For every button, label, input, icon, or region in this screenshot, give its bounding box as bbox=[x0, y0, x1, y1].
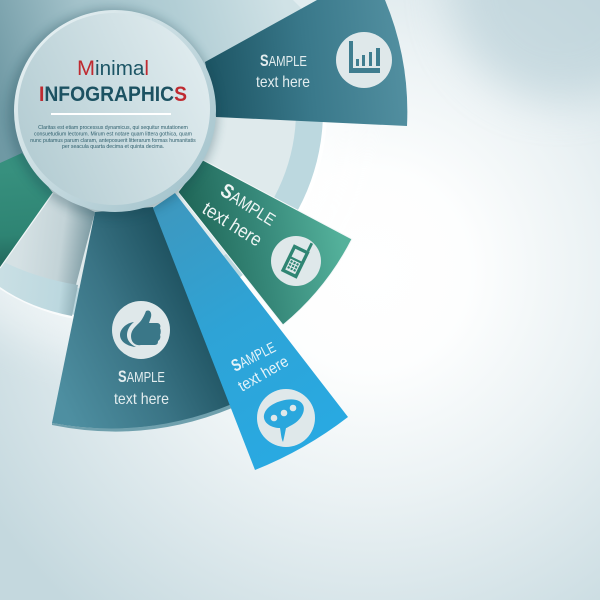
body text: per seacula quarta decima et quinta decima. bbox=[62, 144, 164, 150]
label: bottom sector bbox=[114, 367, 169, 408]
divider bbox=[51, 113, 171, 115]
lower left gray wedge bbox=[0, 193, 95, 316]
label: blue sector bbox=[228, 337, 292, 395]
label: blue sector: text here bbox=[236, 353, 292, 395]
label: top sector: SAMPLE bbox=[260, 51, 307, 70]
label: bottom sector: text here bbox=[114, 391, 169, 408]
label: green sector bbox=[198, 180, 280, 251]
label: green sector: text here bbox=[198, 198, 265, 251]
sector: bottom teal bbox=[52, 207, 232, 432]
icon: bar chart bbox=[336, 32, 392, 88]
title bbox=[39, 57, 187, 106]
sector: blue bbox=[153, 193, 348, 470]
title: INFOGRAPHICS bbox=[39, 82, 187, 106]
main circle bbox=[8, 8, 218, 218]
icon: mobile phone bbox=[271, 236, 321, 286]
label: green sector: SAMPLE bbox=[216, 180, 280, 231]
upper left shaded backdrop bbox=[0, 0, 320, 190]
sector: green bbox=[178, 160, 352, 325]
sector: left green bbox=[0, 153, 53, 268]
label: bottom sector: SAMPLE bbox=[118, 367, 165, 386]
body text bbox=[30, 125, 196, 150]
label: blue sector: SAMPLE bbox=[228, 337, 279, 376]
sector: top teal bbox=[205, 0, 407, 126]
title: Minimal bbox=[77, 57, 149, 80]
backdrop disc with ring bbox=[0, 0, 327, 323]
label: top sector: text here bbox=[256, 74, 310, 91]
icon: thumbs up bbox=[112, 301, 170, 359]
icon: speech bubble bbox=[257, 389, 315, 447]
body text: Claritas est etiam processus dynamicus, qui sequitur mutationem bbox=[38, 125, 188, 131]
body text: nunc putamus parum claram, anteposuerit litterarum formas humanitatis bbox=[30, 138, 196, 144]
label: top sector bbox=[256, 51, 310, 91]
body text: consuetudium lectorum. Mirum est notare quam littera gothica, quam bbox=[34, 132, 192, 138]
